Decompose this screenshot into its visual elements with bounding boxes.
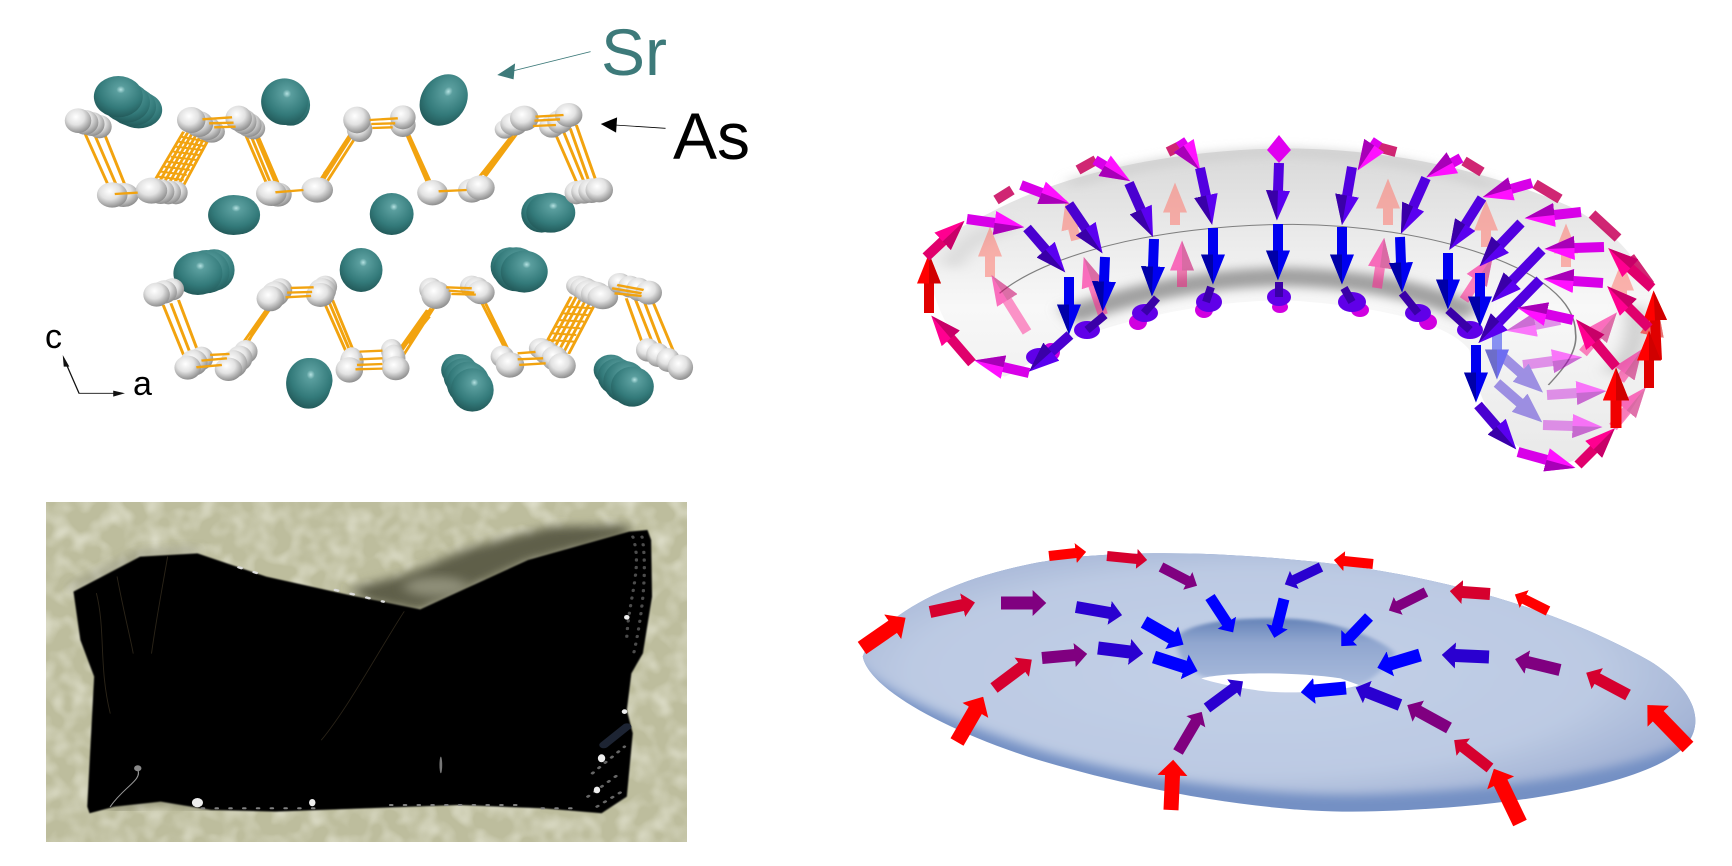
ring 2 — [1021, 185, 1042, 193]
label: axis a: a — [133, 365, 152, 403]
ring 11 — [1644, 360, 1654, 388]
ring 6 — [1374, 140, 1378, 146]
ring 5 centre — [1267, 135, 1291, 163]
crystal sheen and edge speckle — [96, 537, 644, 808]
label: As: As — [673, 99, 750, 173]
panel: crystal photograph — [46, 502, 687, 842]
rear rim arrows — [996, 143, 1650, 285]
label: Sr: Sr — [601, 15, 667, 89]
bond stubs in front — [115, 115, 644, 369]
ring 1 — [924, 283, 934, 313]
arrow: As pointer — [601, 117, 666, 133]
ring 12 bottom-right — [1471, 345, 1481, 373]
panel: disc with radial arrows — [846, 539, 1715, 823]
torus surface — [926, 148, 1658, 467]
ring 3 — [1095, 160, 1105, 166]
arrow-end dots — [1026, 282, 1483, 366]
label: axis c: c — [45, 318, 62, 356]
front arrows — [926, 135, 1657, 465]
bonds — [84, 125, 676, 357]
arrow: Sr pointer — [497, 52, 591, 79]
arrow: crystal axes — [63, 355, 125, 397]
ring 8 — [1511, 183, 1532, 189]
panel: skyrmion torus with 3D arrows — [926, 135, 1658, 467]
black crystal — [73, 530, 652, 813]
ring 7 — [1452, 158, 1461, 163]
panel: crystal structure — [45, 15, 750, 412]
atoms: As — [65, 103, 693, 383]
ring 10 — [1655, 320, 1657, 360]
rear arrows, faded — [990, 208, 1652, 427]
radial arrows — [862, 553, 1688, 823]
disc body — [846, 539, 1715, 812]
crystal shadow — [349, 525, 629, 611]
atoms: Sr — [94, 72, 654, 412]
ring 9 — [1554, 212, 1581, 215]
ring 4 — [1180, 140, 1184, 146]
